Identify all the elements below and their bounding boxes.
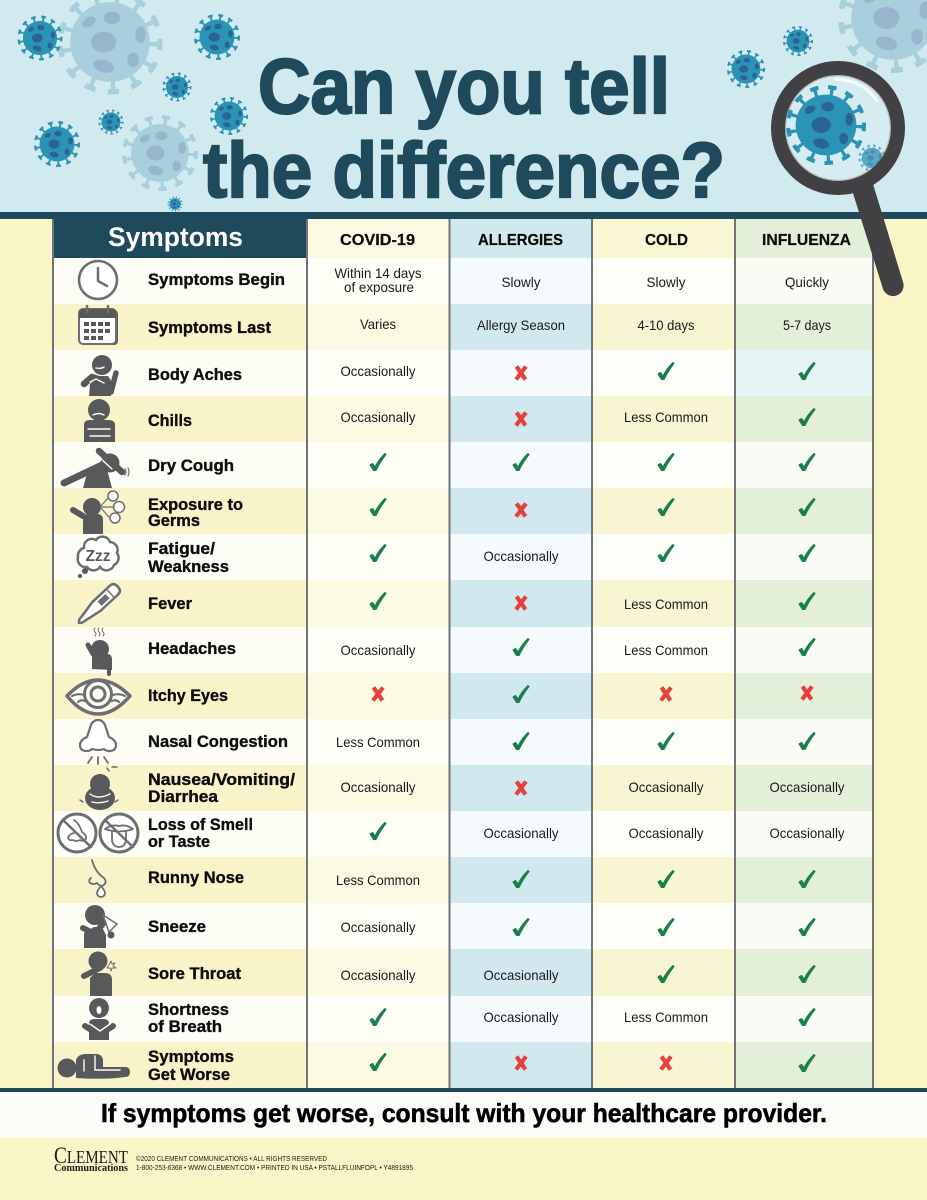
icon: no smell — [58, 814, 96, 852]
cell: sneeze check — [799, 918, 815, 936]
cell: last: Varies — [360, 316, 396, 332]
heading: Cold: COLD — [645, 232, 688, 249]
cell: dry cough check — [370, 454, 386, 470]
cell: worse cross — [516, 1056, 526, 1070]
virus: dark top centre — [195, 15, 239, 59]
cell: loss of smell: Occasionally — [484, 825, 558, 841]
label: Shortness of Breath: Shortness — [148, 1000, 229, 1019]
virus: dark tiny at banner base — [168, 197, 182, 211]
cell: exposure check — [370, 498, 386, 516]
label: Sneeze: Sneeze — [148, 917, 206, 936]
cell: loss of smell: Occasionally — [628, 825, 704, 841]
icon: fatigue thought cloud: Zzz — [86, 548, 110, 565]
cell: body aches cross — [516, 366, 526, 380]
cell: begin — [334, 265, 422, 295]
virus: dark left — [35, 122, 79, 166]
cell: fatigue check — [370, 544, 386, 562]
cell: nasal congestion: Less Common — [336, 734, 420, 750]
icon: chills person — [84, 399, 115, 442]
divider bar under table — [0, 1088, 927, 1092]
label: Loss of Smell or Taste: or Taste — [148, 832, 210, 851]
virus: dark upper right — [784, 27, 812, 55]
cell: chills check — [799, 408, 815, 426]
heading: COVID-19 — [307, 219, 449, 258]
heading: Allergies — [449, 219, 592, 258]
cell: begin: Slowly — [646, 274, 686, 290]
cell: chills cross — [516, 412, 526, 426]
cell: sore throat: Occasionally — [340, 967, 416, 983]
footer legal text: 1-800-253-6368 • WWW.CLEMENT.COM • PRINTED IN USA • PSTALLFLUINFOPL • Y4891895 — [136, 1165, 413, 1172]
label: Fatigue/Weakness: Fatigue/ — [148, 539, 215, 558]
icon: calendar — [79, 306, 118, 345]
label: Exposure to Germs: Germs — [148, 511, 200, 530]
cell: sneeze: Occasionally — [340, 919, 416, 935]
cell: last: 4-10 days — [638, 317, 694, 333]
footer legal text — [136, 1155, 413, 1172]
cell: shortness check — [370, 1008, 386, 1026]
cell: fatigue: Occasionally — [484, 548, 558, 564]
cell: nausea: Occasionally — [628, 779, 704, 795]
cell: loss of smell check — [370, 822, 386, 840]
virus: magnified — [788, 87, 864, 163]
panel: Cold column — [592, 219, 735, 1088]
title: the difference? — [203, 126, 725, 214]
label: Nausea/Vomiting/Diarrhea — [148, 770, 295, 806]
logo: Clement Communications: CLEMENT — [54, 1143, 128, 1168]
cell: dry cough check — [513, 454, 529, 470]
cell: fever check — [370, 592, 386, 610]
cell: nasal check — [799, 732, 815, 750]
cell: worse check — [370, 1054, 386, 1070]
cell: headaches check — [513, 638, 529, 656]
title: Can you tell — [258, 42, 670, 130]
heading: COVID-19: COVID-19 — [340, 232, 415, 249]
divider bar under banner — [0, 212, 927, 219]
icon: headache person — [88, 628, 112, 674]
cell: exposure check — [799, 498, 815, 516]
cell: headaches: Less Common — [624, 642, 708, 658]
label: Loss of Smell or Taste: Loss of Smell — [148, 815, 253, 834]
cell: nausea: Occasionally — [340, 779, 416, 795]
virus: dark small — [163, 73, 191, 101]
cell: headaches check — [799, 638, 815, 656]
virus: dark right — [728, 51, 764, 87]
icon: sore throat person — [84, 952, 116, 996]
cell: shortness: Occasionally — [484, 1009, 558, 1025]
cell: shortness: Less Common — [624, 1009, 708, 1025]
cell: shortness check — [799, 1008, 815, 1026]
cell: runny nose check — [658, 870, 674, 888]
footer legal text: ©2020 CLEMENT COMMUNICATIONS • ALL RIGHTS RESERVED — [136, 1155, 327, 1163]
cell: itchy eyes cross — [373, 688, 383, 700]
heading: Cold — [592, 219, 735, 258]
cell: body aches check — [658, 362, 674, 380]
label: Itchy Eyes: Itchy Eyes — [148, 686, 228, 705]
cell: worse cross — [661, 1056, 671, 1070]
cell: dry cough check — [658, 454, 674, 470]
cell: nasal check — [513, 732, 529, 750]
icon: thermometer — [75, 582, 122, 627]
cell: last: 5-7 days — [783, 317, 831, 333]
cell: runny nose check — [513, 870, 529, 888]
label: Headaches: Headaches — [148, 639, 236, 658]
label: Symptoms Begin: Symptoms Begin — [148, 270, 285, 289]
callout: consult healthcare provider: If symptoms get worse, consult with your healthcare provider. — [101, 1098, 827, 1128]
cell: begin: Slowly — [502, 274, 540, 290]
icon: nausea person — [80, 767, 118, 810]
icon: clock — [79, 261, 117, 299]
label: Exposure to Germs: Exposure to — [148, 495, 243, 514]
virus: dark beside title — [211, 98, 247, 134]
icon: person lying down — [58, 1054, 130, 1079]
icon: body aches person — [84, 355, 116, 396]
icon: shortness of breath person — [85, 998, 113, 1040]
title — [203, 42, 725, 214]
cell: body aches: Occasionally — [340, 363, 416, 379]
header banner — [0, 0, 927, 214]
cell: begin: of exposure — [344, 279, 414, 295]
label: Shortness of Breath: of Breath — [148, 1017, 222, 1036]
cell: fever: Less Common — [624, 596, 708, 612]
icon: exposure to germs person — [73, 491, 124, 534]
icon: dry cough person — [64, 451, 129, 488]
panel: Influenza column — [735, 219, 873, 1088]
callout: consult healthcare provider — [0, 1092, 927, 1138]
virus: dark tiny — [99, 110, 123, 134]
virus: dark top left — [19, 17, 61, 59]
table column rules — [53, 219, 873, 1088]
label: Shortness of Breath — [148, 1000, 229, 1036]
icon: itchy eye — [67, 680, 130, 714]
label: Nausea/Vomiting/Diarrhea: Diarrhea — [148, 787, 219, 806]
cell: body aches check — [799, 362, 815, 380]
panel: Allergies column — [449, 219, 592, 1088]
label: Symptoms Last: Symptoms Last — [148, 318, 271, 337]
label: Runny Nose: Runny Nose — [148, 868, 244, 887]
cell: nasal check — [658, 732, 674, 750]
icon: sneeze person — [83, 905, 117, 948]
cell: exposure check — [658, 498, 674, 516]
label: Symptoms Get Worse: Symptoms — [148, 1047, 234, 1066]
magnifying glass — [778, 68, 904, 296]
cell: begin: Quickly — [785, 274, 829, 290]
cell: loss of smell: Occasionally — [770, 825, 844, 841]
label: Dry Cough: Dry Cough — [148, 456, 234, 475]
label: Fever: Fever — [148, 594, 192, 613]
cell: fatigue check — [658, 544, 674, 562]
cell: chills: Less Common — [624, 409, 708, 425]
virus: pale top right — [841, 0, 927, 70]
label: Sore Throat: Sore Throat — [148, 964, 241, 983]
label: Chills: Chills — [148, 411, 192, 430]
cell: fever cross — [516, 596, 526, 610]
cell: itchy eyes cross — [802, 686, 812, 700]
label: Nasal Congestion: Nasal Congestion — [148, 732, 288, 751]
cell: dry cough check — [799, 454, 815, 470]
heading: Influenza: INFLUENZA — [762, 232, 851, 249]
cell: last: Allergy Season — [477, 317, 565, 333]
cell: runny nose: Less Common — [336, 872, 420, 888]
virus: pale centre left — [124, 117, 196, 189]
virus: large pale top left — [60, 0, 160, 92]
cell: chills: Occasionally — [340, 409, 416, 425]
label: Fatigue/Weakness — [148, 539, 229, 576]
cell: nausea cross — [516, 782, 526, 794]
logo: Clement Communications: Communications — [54, 1163, 128, 1174]
label: Nausea/Vomiting/Diarrhea: Nausea/Vomiting/ — [148, 770, 295, 789]
cell: fever check — [799, 592, 815, 610]
cell: headaches: Occasionally — [340, 642, 416, 658]
icon: fatigue thought cloud — [78, 537, 119, 578]
cell: begin: Within 14 days — [334, 265, 422, 281]
heading: Influenza — [735, 219, 873, 258]
cell: sore throat: Occasionally — [484, 967, 558, 983]
cell: runny nose check — [799, 870, 815, 888]
label: Fatigue/Weakness: Weakness — [148, 557, 229, 576]
panel: COVID-19 column — [307, 219, 449, 1088]
cell: nausea: Occasionally — [770, 779, 844, 795]
cell: sore throat check — [799, 966, 815, 982]
label: Body Aches: Body Aches — [148, 365, 242, 384]
footer — [0, 1138, 927, 1200]
cell: itchy eyes cross — [661, 688, 671, 700]
cell: exposure cross — [516, 504, 526, 516]
heading: Allergies: ALLERGIES — [478, 232, 563, 249]
heading: Symptoms — [53, 219, 307, 258]
cell: itchy eyes check — [513, 686, 529, 702]
panel: symptoms column — [53, 219, 307, 1088]
label: Exposure to Germs — [148, 495, 243, 530]
cell: worse check — [799, 1054, 815, 1072]
cell: sneeze check — [513, 918, 529, 936]
icon: runny nose — [89, 860, 106, 897]
cell: fatigue check — [799, 544, 815, 562]
heading: Symptoms: Symptoms — [108, 222, 243, 252]
label: Symptoms Get Worse: Get Worse — [148, 1065, 230, 1084]
label: Symptoms Get Worse — [148, 1047, 234, 1084]
label: Loss of Smell or Taste — [148, 815, 253, 851]
icon: no taste — [100, 814, 138, 852]
virus: small magnified — [859, 145, 885, 171]
cell: sneeze check — [658, 918, 674, 936]
cell: sore throat check — [658, 966, 674, 982]
icon: congested nose — [80, 720, 116, 764]
